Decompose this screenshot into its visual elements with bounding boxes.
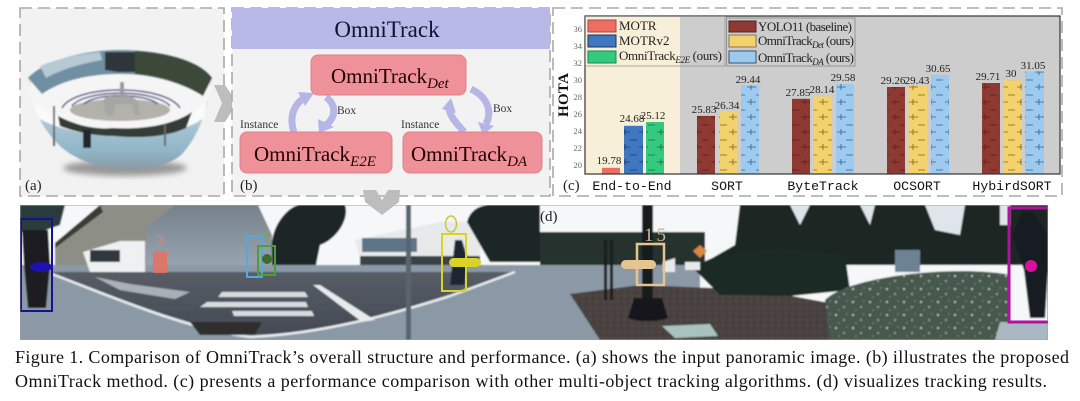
legend: tracking-by-detection methods: OmniTrack [758,33,813,48]
bars: HybirdSORT: 30 [1006,68,1017,80]
module: OmniTrack E2E: OmniTrack [254,142,350,166]
plot frame [585,16,1060,174]
bars: End-to-End: 19.78 [597,155,622,167]
x axis labels: End-to-End [592,179,672,194]
bars: HybirdSORT: 31.05 [1021,60,1046,72]
people [22,230,50,308]
plot background [585,16,1060,174]
legend: tracking-by-detection methods [726,18,855,67]
bars: ByteTrack: 27.85 [786,87,811,99]
y axis: 22 [574,143,582,153]
track IDs: 15 [644,225,669,246]
bars: ByteTrack: 28.14 [810,84,835,96]
module: OmniTrack DA: OmniTrack [411,142,507,166]
y axis: 32 [574,58,582,68]
pole [406,205,411,340]
module: OmniTrack E2E: E2E [349,154,376,170]
bars: End-to-End [597,110,665,174]
photo frame [20,205,1048,340]
legend: tracking-by-detection methods: (ours) [823,50,854,65]
bars: End-to-End: 25.12 [641,110,665,122]
label: (d): (d) [540,209,558,225]
legend: end-to-end methods: (ours) [690,48,722,63]
y axis: 28 [574,92,582,102]
legend: tracking-by-detection methods: OmniTrack [758,50,813,65]
module: OmniTrack DA: DA [506,154,528,170]
y axis: 20 [574,160,582,170]
ground [20,265,700,340]
track IDs: 7 [263,232,270,247]
labels: Instance and Box: Box [493,103,512,115]
legend: end-to-end methods: OmniTrack [619,48,676,63]
caption: Figure 1. Comparison of OmniTrack’s overall structure and performance. (a) shows the input panoramic image. (b) illustrates the proposed [15,347,1069,368]
bars: SORT: 26.34 [715,100,740,112]
label: (b): (b) [240,178,258,194]
panel d: tracking results photo [20,205,1049,340]
road markings [95,277,190,299]
arrows: instance and box loop, right [442,89,494,135]
bars: OCSORT: 30.65 [926,63,951,75]
tracking boxes [21,208,1049,322]
bars: SORT: 29.44 [736,74,761,86]
x axis labels: SORT [711,179,743,194]
bars: End-to-End: 24.68 [620,113,645,125]
y axis: 34 [574,41,583,51]
y axis: 30 [574,75,582,85]
y axis: 26 [574,109,582,119]
track IDs [156,228,666,246]
labels: Instance and Box: Instance [401,119,439,131]
y axis: HOTA [556,73,572,117]
module: OmniTrack Det [311,55,466,95]
arrows: instance and box loop, left [292,92,334,133]
x axis labels: HybirdSORT [972,179,1052,194]
x axis labels [592,179,1052,194]
caption: OmniTrack method. (c) presents a performance comparison with other multi-object tracking algorithms. (d) visualizes tracking results. [15,371,1047,392]
panel a: input panoramic image [20,8,224,196]
y axis [556,24,583,170]
caption [15,347,1069,392]
y axis: 24 [574,126,583,136]
x axis labels: OCSORT [893,179,941,194]
x axis labels: ByteTrack [787,179,859,194]
legend: end-to-end methods: MOTR [619,18,657,33]
header: OmniTrack [232,8,550,49]
icon: panoramic bowl with robot dog [28,50,212,176]
bars: SORT: 25.83 [692,104,717,116]
bus [83,241,145,272]
bars: SORT [692,74,761,174]
panel b: OmniTrack method [232,8,550,196]
bars: OCSORT: 29.43 [905,75,930,87]
legend: end-to-end methods [586,16,725,66]
module: OmniTrack DA [403,132,542,173]
bars: OCSORT: 29.26 [881,75,906,87]
labels: Instance and Box [240,103,512,131]
bars: ByteTrack [786,72,856,174]
legend: tracking-by-detection methods: YOLO11 (baseline) [758,19,852,34]
legend: end-to-end methods: MOTRv2 [619,33,670,48]
label: (c): (c) [563,178,580,194]
arrow: a to b [214,85,237,122]
module: OmniTrack E2E [240,132,392,173]
photo background [20,205,1048,340]
legend: tracking-by-detection methods: Det [811,40,824,50]
labels: Instance and Box: Instance [240,119,278,131]
legend: end-to-end methods: E2E [674,55,691,65]
panel c: performance chart [553,8,1062,196]
track IDs: 3 [156,233,164,250]
legend: tracking-by-detection methods: (ours) [823,33,854,48]
module: OmniTrack Det: OmniTrack [331,64,427,88]
label: (a): (a) [25,178,42,194]
bars: HybirdSORT [976,60,1046,174]
bars: HybirdSORT: 29.71 [976,71,1000,83]
bars: ByteTrack: 29.58 [831,72,856,84]
legend: tracking-by-detection methods: DA [811,57,824,67]
arrow: chevron down to photo [363,190,400,215]
labels: Instance and Box: Box [337,105,356,117]
y axis: 36 [574,24,582,34]
module: OmniTrack Det: Det [426,76,450,92]
header: OmniTrack: OmniTrack [334,17,440,42]
bars: OCSORT [881,63,951,174]
